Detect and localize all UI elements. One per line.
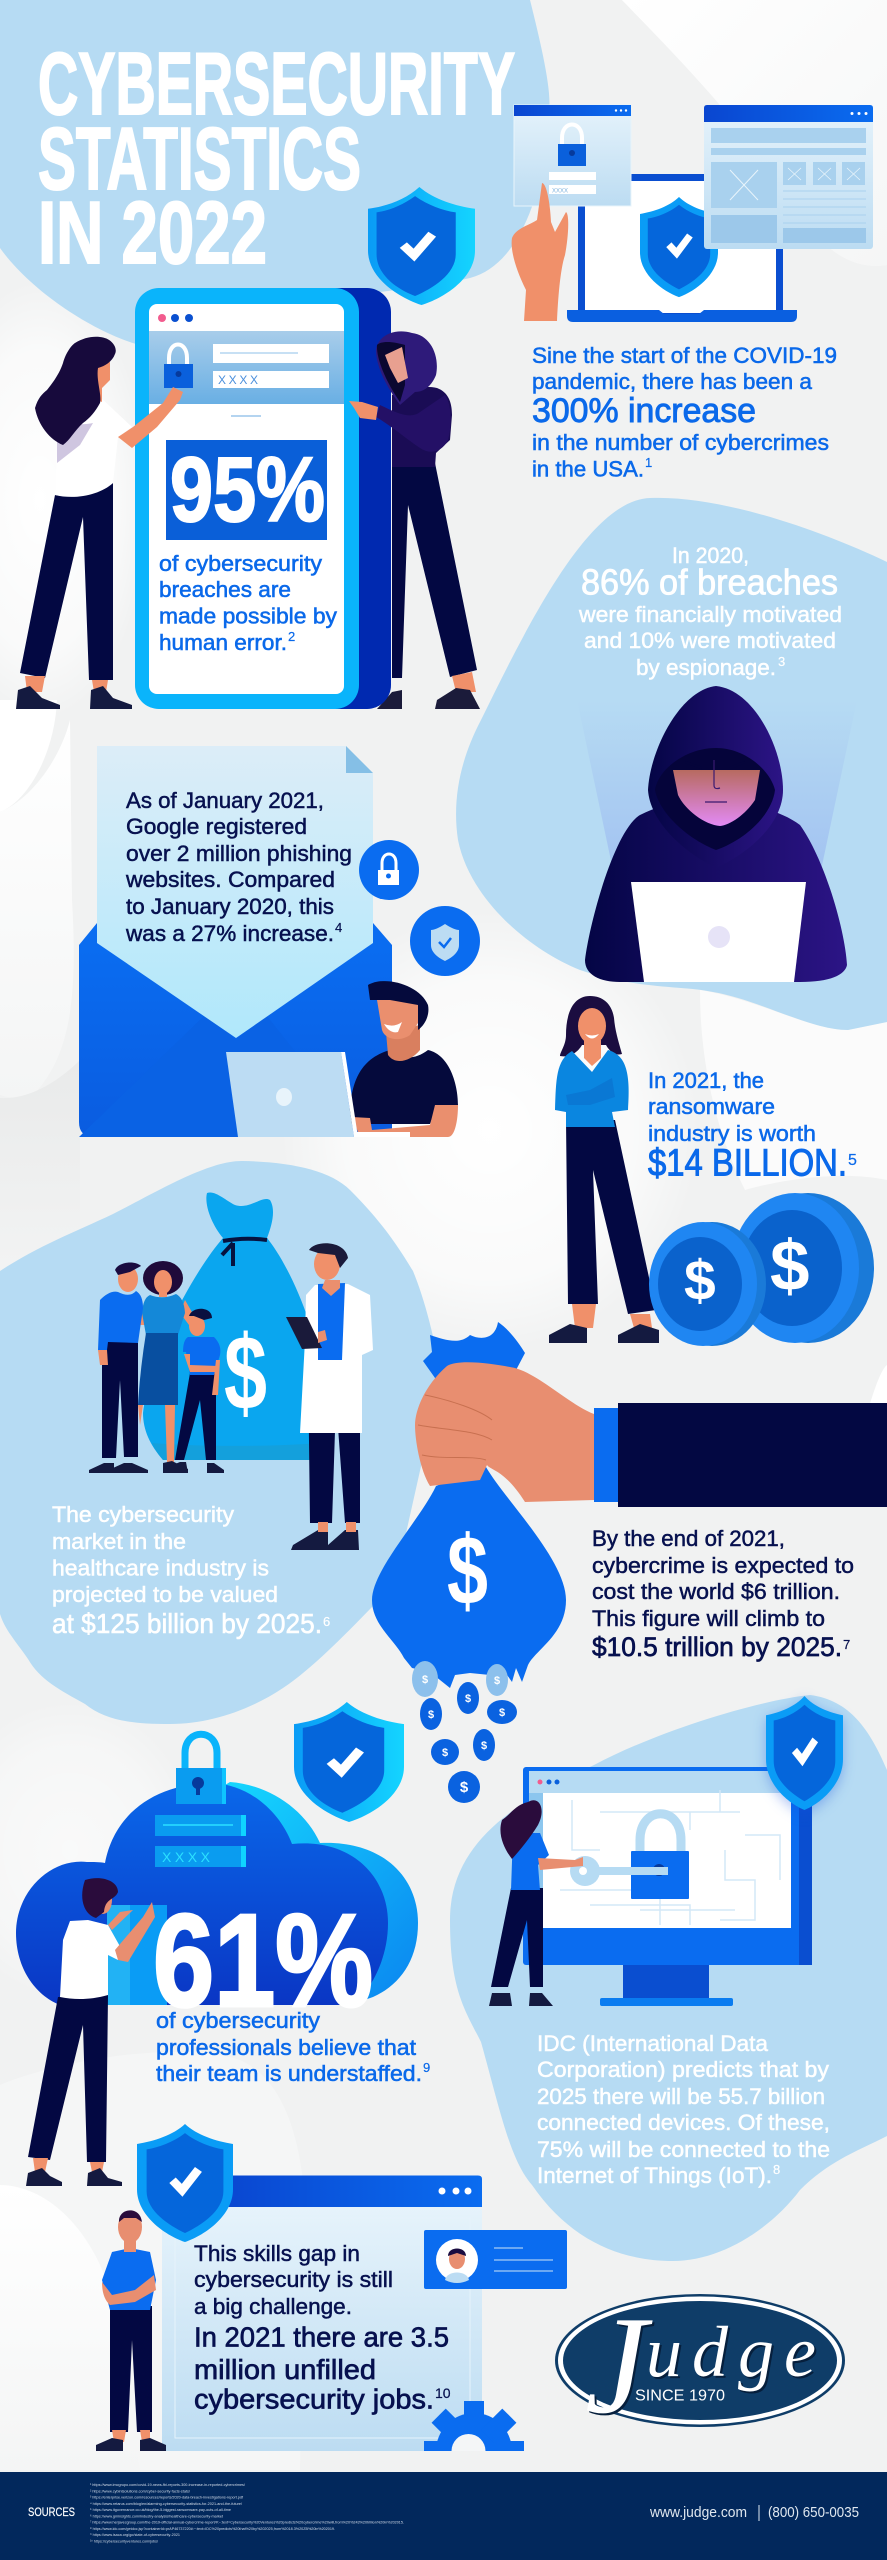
icon: falling coins: $ — [494, 1675, 500, 1687]
text: cost to the world — [592, 1526, 854, 1662]
text: 300% increase: in the number of cybercrimes — [532, 430, 829, 455]
text: IDC: 8 — [773, 2162, 780, 2177]
text: 300% increase: 300% increase — [532, 392, 756, 430]
panel: top blue blob — [0, 0, 549, 344]
text: skills gap: This skills gap in — [194, 2241, 360, 2266]
text: ransomware: ransomware — [648, 1094, 775, 1119]
icon: falling coins: $ — [428, 1709, 434, 1721]
icon: coins: $ — [684, 1249, 716, 1313]
window: login — [514, 105, 631, 206]
logo: Judge: SINCE 1970 — [635, 2388, 725, 2404]
bag body — [372, 1467, 566, 1688]
text: understaffed — [156, 2008, 430, 2086]
sources list: ⁵ https://www.itgovernance.co.uk/blog/the-5-biggest-ransomware-pay-outs-of-all-time — [90, 2508, 231, 2512]
text: 86% of breaches: In 2020, — [672, 543, 749, 568]
window: content — [704, 105, 873, 249]
icon: falling coins: $ — [442, 1747, 448, 1759]
text: ransomware: $14 BILLION. — [648, 1142, 847, 1184]
text: human error: made possible by — [159, 604, 337, 628]
icon: shield top — [368, 187, 475, 305]
text: cost to the world: This figure will climb to — [592, 1606, 825, 1631]
cloud login fields — [155, 1815, 246, 1867]
icon: phone lock — [164, 344, 193, 388]
figure: man in family — [89, 1263, 148, 1473]
figure: hacker — [349, 331, 452, 467]
bag frill — [423, 1322, 525, 1385]
contact details: www.judge.com — [649, 2504, 747, 2521]
contact details: (800) 650-0035 — [768, 2504, 859, 2521]
text: phishing: over 2 million phishing — [126, 841, 352, 866]
text: IDC: Corporation) predicts that by — [537, 2057, 829, 2082]
figure: boy in family — [165, 1309, 224, 1473]
text: 86% of breaches: by espionage. — [636, 655, 776, 680]
icon: shield right — [766, 1696, 843, 1810]
text: cost to the world: cost the world $6 trillion. — [592, 1579, 840, 1604]
icon: lock circle — [359, 840, 419, 900]
panel: skills gap window — [162, 2176, 482, 2451]
icon: money bag — [143, 1192, 333, 1460]
illustration: hooded hacker at laptop — [577, 686, 857, 982]
sources heading: SOURCES — [28, 2505, 75, 2519]
sources list: ⁹ https://www.isaca.org/go/state-of-cybersecurity-2021 — [90, 2533, 180, 2537]
text: skills gap: cybersecurity jobs. — [194, 2384, 434, 2414]
icon: hand — [512, 183, 568, 321]
illustration: fist gripping money bag — [372, 1322, 887, 1688]
sources list: ⁸ https://www.idc.com/getdoc.jsp?containerId=prAP46737220#:~:text=IDC%20predicts%20that%20by%202025,from%2018.3%20ZB%20in%202019. — [90, 2527, 335, 2531]
icon: laptop shield — [640, 197, 718, 297]
sources list: ¹⁰ https://cybersecurityventures.com/jobs/ — [90, 2540, 158, 2544]
sources list: ² https://www.cybintsolutions.com/cyber-security-facts-stats/ — [90, 2490, 190, 2494]
icon: falling coins — [412, 1661, 517, 1803]
icon: money bag: $ — [224, 1314, 267, 1432]
title: IN 2022 — [38, 183, 267, 282]
text: 300% increase: 1 — [645, 455, 652, 470]
text: IDC: connected devices. Of these, — [537, 2110, 830, 2135]
text: human error: 2 — [288, 629, 295, 644]
icon: falling coins: $ — [422, 1674, 428, 1686]
figure: woman in family — [135, 1261, 200, 1473]
window: login: XXXX — [552, 188, 568, 194]
icon: profile card — [424, 2230, 567, 2289]
text: healthcare market: market in the — [52, 1529, 186, 1554]
text: cost to the world: cybercrime is expected to — [592, 1553, 854, 1578]
text: ransomware — [648, 1068, 857, 1184]
sources list: ¹ https://www.imcgrupo.com/covid-19-news-fbi-reports-300-increase-in-reported-cybercrimes/ — [90, 2483, 245, 2487]
figure: woman — [16, 337, 183, 709]
phone body: XXXX — [218, 373, 258, 387]
stat box 95%: 95% — [170, 439, 325, 541]
sources list — [90, 2483, 404, 2544]
icon: gear — [424, 2401, 524, 2451]
text: understaffed: 9 — [423, 2060, 430, 2075]
text: 86% of breaches: 86% of breaches — [581, 562, 838, 602]
logo: Judge — [555, 2288, 845, 2443]
text: IDC: 2025 there will be 55.7 billion — [537, 2084, 825, 2109]
bag body: $ — [447, 1515, 488, 1625]
figure: doctor — [286, 1243, 373, 1550]
text: healthcare market: healthcare industry is — [52, 1556, 269, 1580]
text: human error — [159, 551, 337, 655]
figure: woman with key — [489, 1800, 583, 2006]
text: healthcare market: 6 — [323, 1614, 330, 1629]
monitor — [523, 1767, 812, 2006]
hacker legs — [377, 463, 480, 709]
text: 86% of breaches: and 10% were motivated — [584, 628, 836, 653]
illustration: laptop, windows and hand — [512, 105, 873, 322]
text: IDC: Internet of Things (IoT). — [537, 2163, 772, 2188]
title: STATISTICS — [38, 109, 361, 208]
text: healthcare market: The cybersecurity — [52, 1502, 234, 1527]
hand — [415, 1362, 594, 1502]
text: skills gap: a big challenge. — [194, 2294, 352, 2319]
text: skills gap: In 2021 there are 3.5 — [194, 2322, 449, 2352]
text: skills gap: 10 — [435, 2385, 451, 2401]
text: skills gap: cybersecurity is still — [194, 2267, 393, 2292]
text: ransomware: In 2021, the — [648, 1068, 764, 1093]
illustration: healthcare family and doctor — [89, 1192, 373, 1550]
text: healthcare market — [52, 1502, 330, 1639]
icon: falling coins: $ — [499, 1707, 505, 1719]
panel: breaches blob — [456, 498, 887, 1030]
text: healthcare market: at $125 billion by 2025. — [52, 1608, 322, 1639]
contact details — [649, 2504, 859, 2521]
panel: IDC blob — [450, 1695, 887, 2261]
text: ransomware: industry is worth — [648, 1121, 816, 1146]
laptop — [567, 174, 797, 322]
text: 300% increase: pandemic, there has been a — [532, 369, 813, 394]
icon: shield bottom — [137, 2124, 233, 2242]
text: phishing: websites. Compared — [125, 867, 335, 892]
text: cost to the world: By the end of 2021, — [592, 1526, 785, 1551]
text: phishing: Google registered — [126, 814, 307, 839]
figure: man with crossed arms — [96, 2210, 166, 2451]
text: cost to the world: $10.5 trillion by 2025. — [592, 1632, 842, 1662]
sources list: ⁶ https://www.gminsights.com/industry-analysis/healthcare-cybersecurity-market — [90, 2514, 223, 2518]
text: ransomware: 5 — [848, 1152, 857, 1169]
text: 300% increase: in the USA. — [532, 456, 644, 482]
text: phishing — [125, 788, 352, 946]
title — [38, 34, 515, 282]
text: IDC: IDC (International Data — [537, 2031, 769, 2056]
icon: coins: $ — [770, 1227, 810, 1306]
illustration: cloud with lock — [16, 1734, 418, 2034]
icon: falling coins: $ — [465, 1693, 471, 1705]
logo: Judge: udge — [646, 2312, 826, 2392]
phone body — [135, 288, 391, 709]
text: human error: of cybersecurity — [159, 551, 322, 576]
figure: man with laptop — [226, 981, 458, 1137]
text: 86% of breaches — [578, 543, 842, 680]
icon: shield circle — [410, 906, 480, 976]
text: understaffed: professionals believe that — [156, 2035, 416, 2060]
text: understaffed: their team is understaffed. — [156, 2061, 422, 2086]
sleeve — [594, 1403, 887, 1507]
cloud — [16, 1782, 418, 2005]
illustration: envelope with letter — [79, 746, 392, 1137]
icon: lock and key — [570, 1814, 689, 1899]
sources list: ³ https://enterprise.verizon.com/resources/reports/2020-data-breach-investigations-report.pdf — [90, 2496, 243, 2500]
text: 300% increase: Sine the start of the COVID-19 — [532, 343, 837, 368]
panel behind figure — [107, 1905, 167, 2005]
text: phishing: to January 2020, this — [126, 894, 334, 919]
text: IDC — [537, 2031, 830, 2188]
sources list: ⁷ https://www.herjavecgroup.com/the-2019-official-annual-cybercrime-report/#:~:text=Cybersecurity%20Ventures%20predicts%20cybercrime%20will,from%20%243%20trillion%20in%202015. — [90, 2520, 404, 2524]
illustration: monitor with key and lock — [489, 1767, 812, 2006]
panel: healthcare blob — [0, 1161, 441, 1724]
text: 300% increase — [532, 343, 837, 482]
text: phishing: 4 — [335, 920, 342, 935]
text: human error: breaches are — [159, 577, 291, 602]
text: understaffed: of cybersecurity — [156, 2008, 320, 2033]
text: healthcare market: projected to be valued — [52, 1582, 278, 1607]
text: cost to the world: 7 — [843, 1637, 850, 1652]
stat 61%: 61% — [153, 1887, 373, 2034]
text: phishing: As of January 2021, — [126, 788, 324, 813]
text: 86% of breaches: were financially motivated — [578, 602, 842, 627]
text: 86% of breaches: 3 — [778, 654, 785, 669]
text: human error: human error. — [159, 630, 287, 655]
icon: shield middle — [294, 1702, 404, 1822]
icon: falling coins: $ — [481, 1740, 487, 1752]
text: skills gap — [194, 2241, 451, 2414]
footer — [0, 2472, 887, 2560]
cloud lock — [176, 1734, 226, 1804]
illustration: phone with woman and hacker — [16, 288, 480, 709]
figure: woman with crossed arms — [549, 996, 659, 1343]
title: CYBERSECURITY — [38, 34, 515, 133]
text: phishing: was a 27% increase. — [125, 921, 334, 946]
icon: falling coins: $ — [460, 1779, 469, 1796]
cloud login fields: XXXX — [162, 1849, 211, 1865]
icon: coins — [649, 1193, 874, 1346]
figure: man at cloud — [26, 1878, 155, 2186]
logo: Judge: J — [585, 2288, 653, 2443]
text: skills gap: million unfilled — [194, 2354, 376, 2385]
text: IDC: 75% will be connected to the — [537, 2137, 830, 2162]
sources list: ⁴ https://www.retarus.com/blog/en/alarming-cybersecurity-statistics-for-2021-and-the-future/ — [90, 2502, 242, 2506]
